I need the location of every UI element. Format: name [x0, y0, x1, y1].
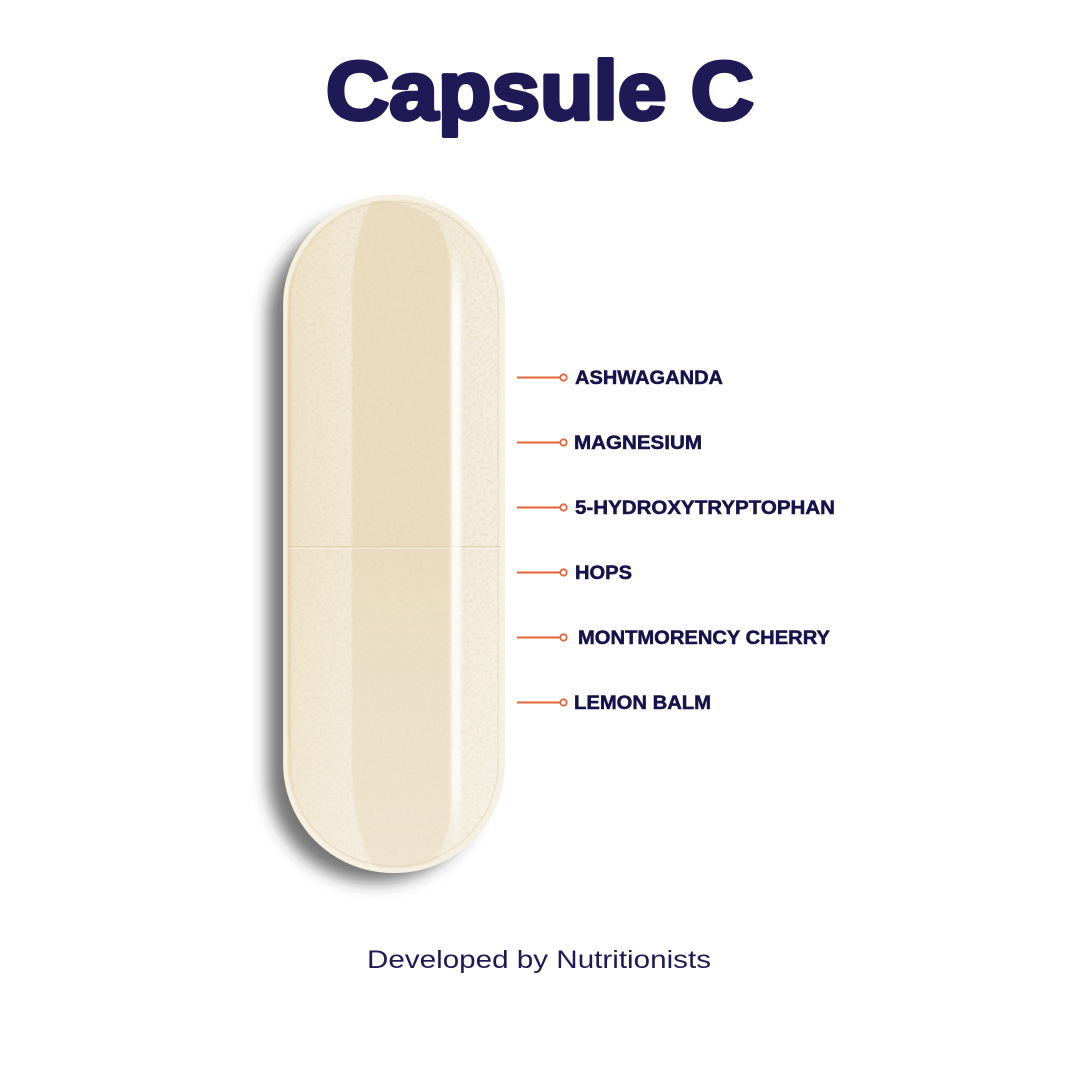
callout: lemon balm: LEMON BALM: [574, 693, 711, 714]
central darker band: [352, 200, 452, 868]
left edge tint: [283, 320, 289, 740]
capsule seam: [283, 546, 505, 548]
capsule shadow: [268, 214, 483, 882]
callout: magnesium: [517, 433, 702, 454]
capsule body: [283, 195, 505, 873]
callout: hops: [517, 563, 632, 584]
lower half light overlay: [283, 706, 496, 873]
callout: 5-hydroxytryptophan: 5-HYDROXYTRYPTOPHAN: [575, 498, 835, 519]
footer text: Developed by Nutritionists: [367, 946, 711, 974]
vertical shine: [451, 245, 461, 845]
capsule inner rim: [290, 202, 498, 866]
callout: hops: HOPS: [575, 563, 632, 584]
callout: lemon balm: [517, 693, 711, 714]
callout: montmorency cherry: MONTMORENCY CHERRY: [578, 628, 830, 649]
callout: magnesium: MAGNESIUM: [574, 433, 702, 454]
capsule: [268, 195, 505, 882]
capsule speckle texture: [308, 195, 505, 862]
callout: ashwaganda: [517, 368, 723, 389]
title: Capsule C: [326, 44, 754, 137]
callout: ashwaganda: ASHWAGANDA: [575, 368, 723, 389]
